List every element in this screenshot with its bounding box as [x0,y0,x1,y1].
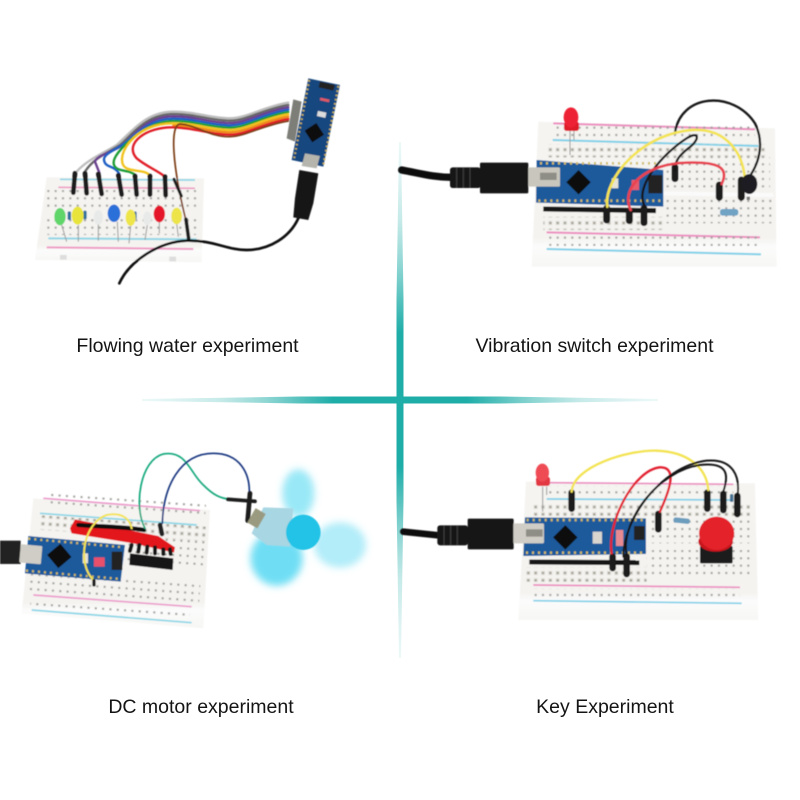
label: vibration switch: Vibration switch experiment [475,335,714,357]
rainbow ribbon wires [77,103,288,223]
jumper pins [607,167,741,223]
panel: DC motor experiment [0,453,366,718]
label: flowing water: Flowing water experiment [76,335,299,357]
fan blades [251,469,366,586]
jumper wires [572,451,738,557]
jumper wires [84,453,249,580]
Nano board [528,160,663,211]
circuit photo: vibration switch [402,101,777,267]
jumper pins [572,493,737,574]
jumper pins [94,493,255,585]
jumper wires [607,101,760,210]
circuit photo: DC motor [0,453,366,628]
breadboard [22,492,210,628]
DC motor [247,507,293,547]
LED row [54,205,182,243]
breadboard [532,122,777,267]
circuit photo: flowing water [35,78,340,283]
IC chip [129,553,173,570]
breadboard [518,482,758,620]
USB plug [0,541,21,564]
jumper pins [73,173,189,239]
breadboard [35,177,204,262]
USB cable [119,170,318,283]
red and black jumper bundle [70,519,175,554]
resistor [720,209,738,216]
Nano board [513,517,646,563]
panel: key experiment [403,451,758,718]
Nano board [287,78,340,168]
label: DC motor: DC motor experiment [108,696,294,718]
Nano board [19,536,125,582]
label: key experiment: Key Experiment [536,696,674,718]
panel: vibration switch experiment [402,101,777,357]
red LED [536,464,550,512]
USB cable and plug [403,519,514,549]
circuit photo: key [403,451,758,620]
USB cable and plug [402,163,528,193]
fan hub [286,515,321,550]
red LED [564,107,579,155]
vibration sensor [741,174,757,200]
resistors [673,494,733,524]
panel: flowing water experiment [35,78,340,357]
cross divider [142,142,658,658]
push button [698,517,734,563]
